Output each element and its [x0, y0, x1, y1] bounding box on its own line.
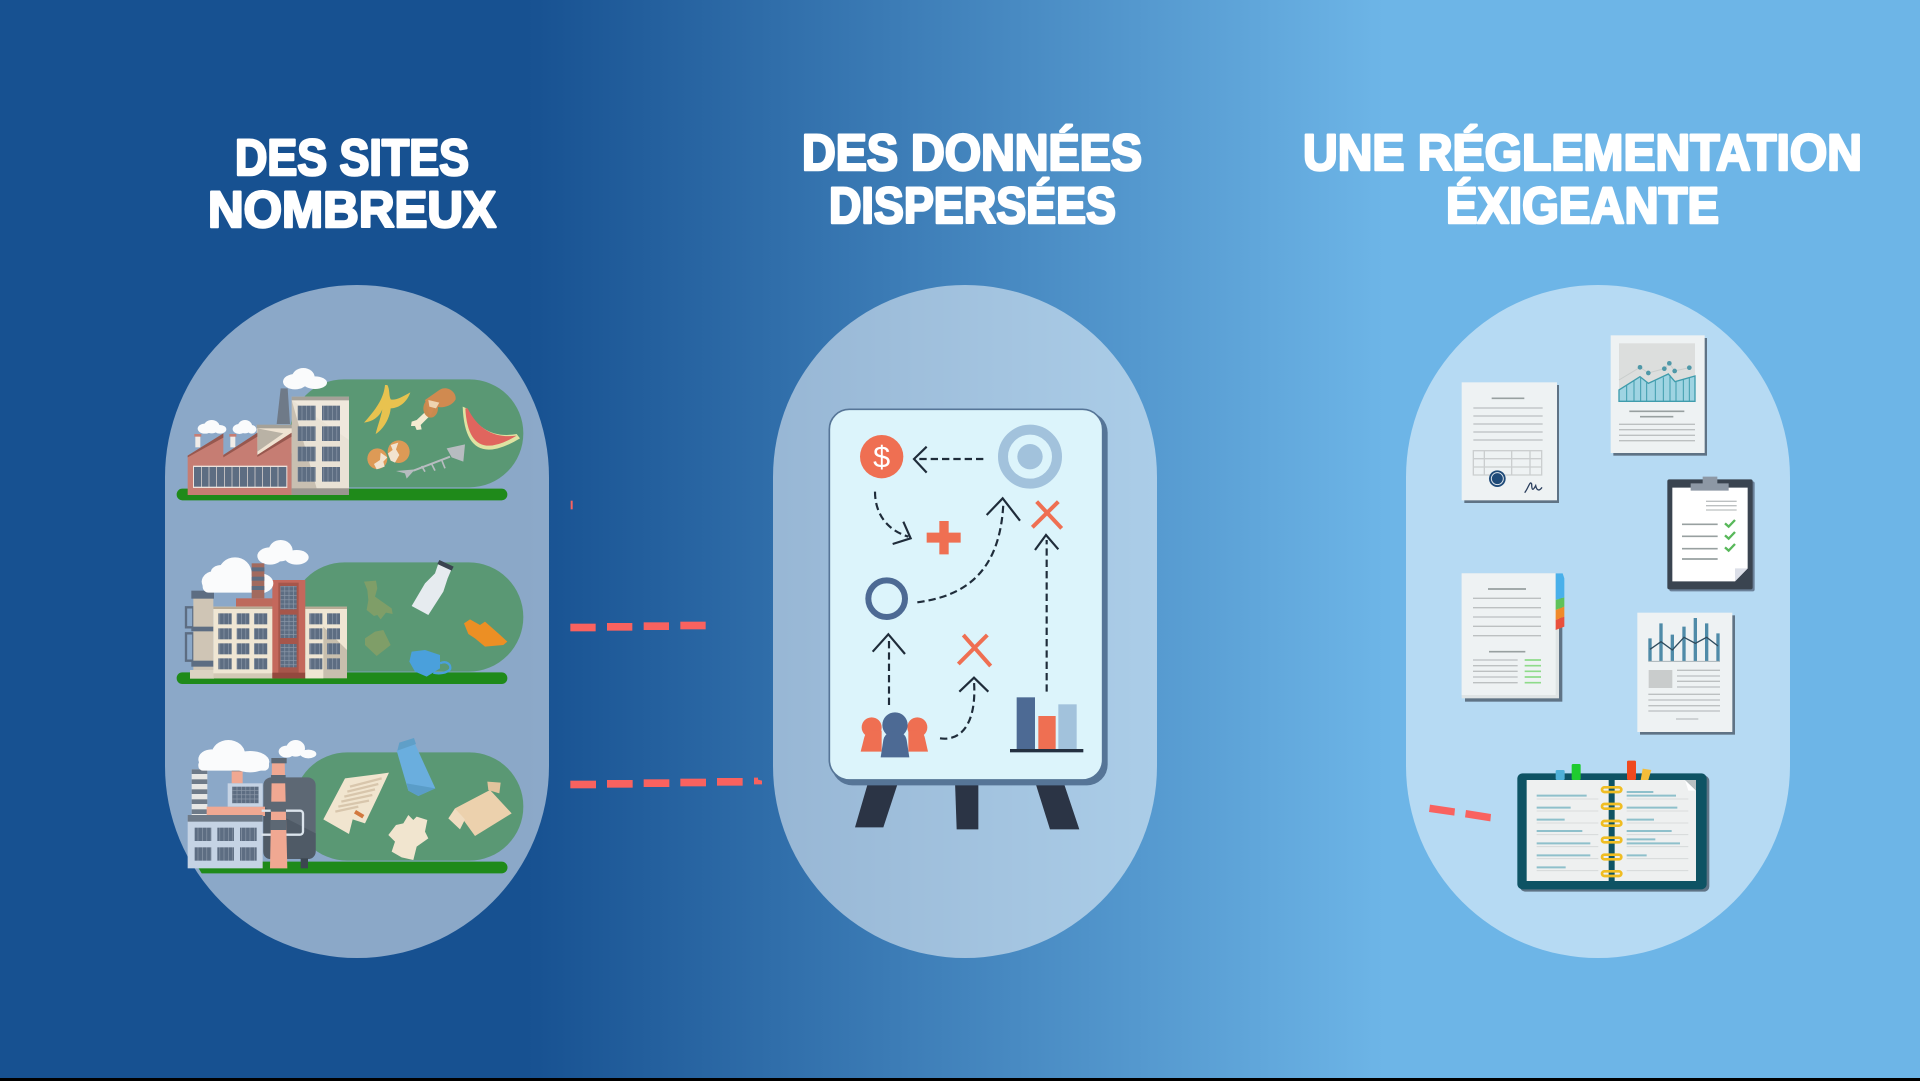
icon: broken eggshells [367, 440, 410, 469]
icon: broken blue cup [409, 650, 450, 677]
arrow: chart to cross [1035, 535, 1058, 692]
easel legs [855, 782, 1079, 829]
icon: cardboard box [448, 782, 512, 836]
icon: top cross [1032, 502, 1062, 528]
icon: lower cross [958, 635, 991, 666]
arrow: target to coin [914, 447, 983, 473]
green pill background [290, 379, 523, 487]
icon: target [1003, 430, 1057, 484]
title: des données dispersées [802, 124, 1142, 234]
icon: bar chart [1010, 697, 1083, 752]
ground strip [195, 862, 507, 873]
title: des sites nombreux: DES SITES [235, 129, 469, 186]
icon: people [861, 712, 928, 757]
icon: spiral notebook [1517, 761, 1709, 892]
row 3: factory and paper waste [188, 738, 523, 873]
title: des données dispersées: DES DONNÉES [802, 124, 1142, 181]
title: une réglementation exigeante [1303, 124, 1862, 234]
icon: clouds [198, 740, 316, 772]
document: certificate [1462, 382, 1559, 503]
ground strip [177, 672, 507, 684]
green pill background [290, 562, 523, 672]
title: une réglementation exigeante: UNE RÉGLEMENTATION [1303, 124, 1862, 181]
document: tabbed report [1462, 573, 1564, 702]
panel: sites capsule [165, 285, 549, 958]
icon: watermelon slice [463, 407, 520, 450]
row 1: factory and food waste [177, 368, 523, 500]
documents upper group [1462, 335, 1755, 591]
arrow: coin to plus [875, 492, 911, 544]
icon: striped stack over cloud [252, 563, 264, 598]
icon: red tower factory [186, 580, 347, 679]
icon: grey factory [188, 758, 316, 868]
row 2: factory and glass waste [177, 540, 523, 684]
title: des sites nombreux: NOMBREUX [208, 181, 496, 238]
title: des données dispersées: DISPERSÉES [829, 177, 1116, 234]
icon: crumpled paper [388, 815, 428, 860]
document: area chart report [1611, 335, 1707, 456]
icon: dollar coin: $ [873, 441, 890, 475]
dashed red stroke near notebook [1429, 805, 1491, 821]
icon: orange shard [464, 619, 507, 647]
icon: clouds [198, 368, 327, 434]
icon: strategy board [829, 409, 1108, 829]
document: line and bar report [1637, 613, 1735, 735]
icon: brick factory [188, 388, 349, 495]
arrow: people to ring [873, 634, 905, 705]
icon: ring [868, 580, 905, 617]
icon: newspaper [323, 773, 389, 834]
title: une réglementation exigeante: ÉXIGEANTE [1446, 177, 1719, 234]
title: des sites nombreux [208, 129, 496, 238]
icon: broken green bottle [364, 581, 393, 656]
icon: clouds [202, 540, 309, 593]
icon: milk carton [397, 738, 435, 796]
dashed red connectors [570, 501, 762, 788]
document: clipboard checklist [1667, 477, 1755, 591]
green pill background [293, 752, 523, 861]
arrow: ring to target [917, 498, 1020, 602]
icon: dollar coin [860, 435, 903, 478]
ground strip [177, 489, 507, 500]
documents lower group [1429, 573, 1735, 892]
icon: plus [927, 521, 961, 554]
board [829, 409, 1108, 785]
icon: chicken bone [411, 388, 456, 430]
panel: regulation capsule [1406, 285, 1790, 958]
panel: data capsule [773, 285, 1157, 958]
icon: fish bones [396, 444, 465, 479]
icon: milk bottle [412, 560, 454, 615]
icon: banana peel [364, 385, 410, 434]
arrow: people to cross [940, 678, 988, 739]
